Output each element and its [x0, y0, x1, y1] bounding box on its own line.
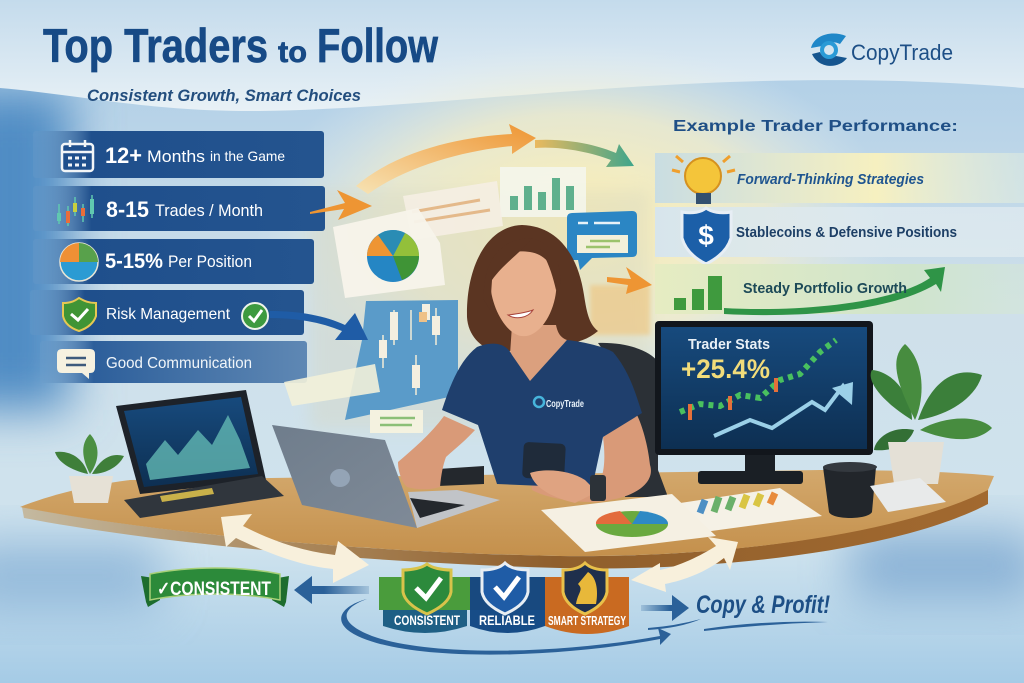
desk documents [541, 462, 946, 552]
plant: left [55, 434, 124, 503]
criterion: trades: 8-15 [106, 197, 149, 222]
arrow: blue left [294, 576, 369, 604]
criterion: trades [33, 186, 325, 231]
badge: reliable: RELIABLE [479, 612, 535, 628]
right arm [530, 415, 651, 502]
criterion: position: Per Position [168, 252, 252, 271]
monitor chart [680, 340, 853, 436]
logo: CopyTrade [811, 33, 953, 66]
candlestick panel [345, 300, 458, 420]
badge: smart strategy: SMART STRATEGY [548, 613, 626, 628]
background lower left wash [0, 540, 160, 610]
row: forward-thinking [655, 153, 1024, 204]
criterion: trades: Trades / Month [155, 201, 263, 220]
header swoosh [0, 0, 1024, 111]
note card lower [370, 410, 423, 433]
smile [508, 310, 533, 318]
background blue under desk [850, 530, 1024, 600]
badge: consistent [379, 564, 470, 633]
document: bars [667, 488, 822, 532]
arrow: blue to chart [270, 311, 368, 340]
shirt [442, 340, 642, 488]
monitor heading: Trader Stats [688, 336, 770, 353]
arrow: desk right (double) [631, 537, 738, 592]
title: Follow [317, 19, 438, 72]
arrow: to copy and profit [641, 595, 689, 621]
desk [20, 470, 994, 568]
panel: trader criteria [30, 131, 325, 383]
row: portfolio growth [655, 264, 1024, 315]
chart card: green bars [500, 167, 586, 217]
panel: example trader performance [655, 118, 1024, 315]
criterion: months: 12+ [105, 143, 142, 168]
callout: copy and profit: Copy & Profit! [696, 591, 830, 619]
neck [510, 325, 567, 382]
row: forward-thinking: Forward-Thinking Strategies [737, 171, 924, 188]
ribbon: consistent: ✓CONSISTENT [157, 579, 271, 600]
title [43, 19, 438, 72]
badge: smart strategy [545, 563, 629, 634]
trader monitor [655, 321, 873, 484]
arrow: orange to chart [310, 190, 372, 220]
main laptop [272, 425, 500, 528]
paper [870, 478, 946, 512]
criterion: position [33, 239, 314, 284]
criterion: months [33, 131, 324, 178]
arrow: large orange curve [356, 124, 536, 194]
arrow: desk left (double) [221, 514, 369, 583]
plant: right [871, 344, 992, 484]
chair [598, 343, 668, 497]
subtitle: Consistent Growth, Smart Choices [87, 86, 361, 105]
phone [522, 442, 566, 480]
trader woman [398, 225, 651, 503]
centre glow [255, 40, 895, 410]
cup [823, 462, 877, 518]
shirt logo [534, 397, 584, 410]
criterion: position: 5-15% [105, 250, 163, 273]
arrow: copy sweep [341, 599, 671, 655]
heading: Example Trader Performance: [673, 118, 958, 135]
document card [403, 181, 503, 240]
pie card [333, 208, 445, 298]
watch [590, 475, 606, 501]
left arm [398, 416, 475, 489]
monitor value: +25.4% [681, 354, 770, 384]
hair front [484, 238, 532, 310]
note card left [284, 364, 380, 406]
row: portfolio growth: Steady Portfolio Growth [743, 280, 907, 297]
backdrop tint behind papers [310, 190, 650, 430]
callout: copy and profit [648, 591, 830, 631]
title: Top Traders [43, 19, 268, 72]
arrow: small orange [607, 267, 652, 294]
criterion: months: Months [147, 147, 205, 166]
criterion: risk: Risk Management [106, 306, 231, 323]
criterion: communication: Good Communication [106, 355, 252, 372]
title: to [278, 36, 307, 69]
criterion: months: in the Game [210, 148, 285, 164]
icon: risk check [242, 303, 268, 329]
speech bubble [567, 211, 637, 270]
arrow: teal curve [535, 140, 634, 167]
badges [379, 563, 629, 634]
background left blue wash [0, 90, 70, 410]
chair arm [438, 466, 484, 486]
left laptop [116, 390, 284, 518]
badge: consistent: CONSISTENT [394, 612, 460, 628]
hair back [467, 225, 598, 353]
row: stablecoins: $ [698, 220, 714, 251]
criterion: risk [30, 290, 304, 335]
shirt logo: CopyTrade [546, 399, 584, 410]
row: stablecoins: Stablecoins & Defensive Positions [736, 224, 957, 241]
row: stablecoins [655, 207, 1024, 264]
logo: CopyTrade: CopyTrade [851, 40, 953, 65]
badge: reliable [470, 563, 545, 633]
criterion: communication [40, 341, 307, 383]
document: pie [541, 494, 716, 552]
hand on phone [530, 470, 597, 503]
floating charts [284, 167, 652, 433]
ribbon: consistent [141, 568, 289, 607]
face [490, 251, 556, 336]
